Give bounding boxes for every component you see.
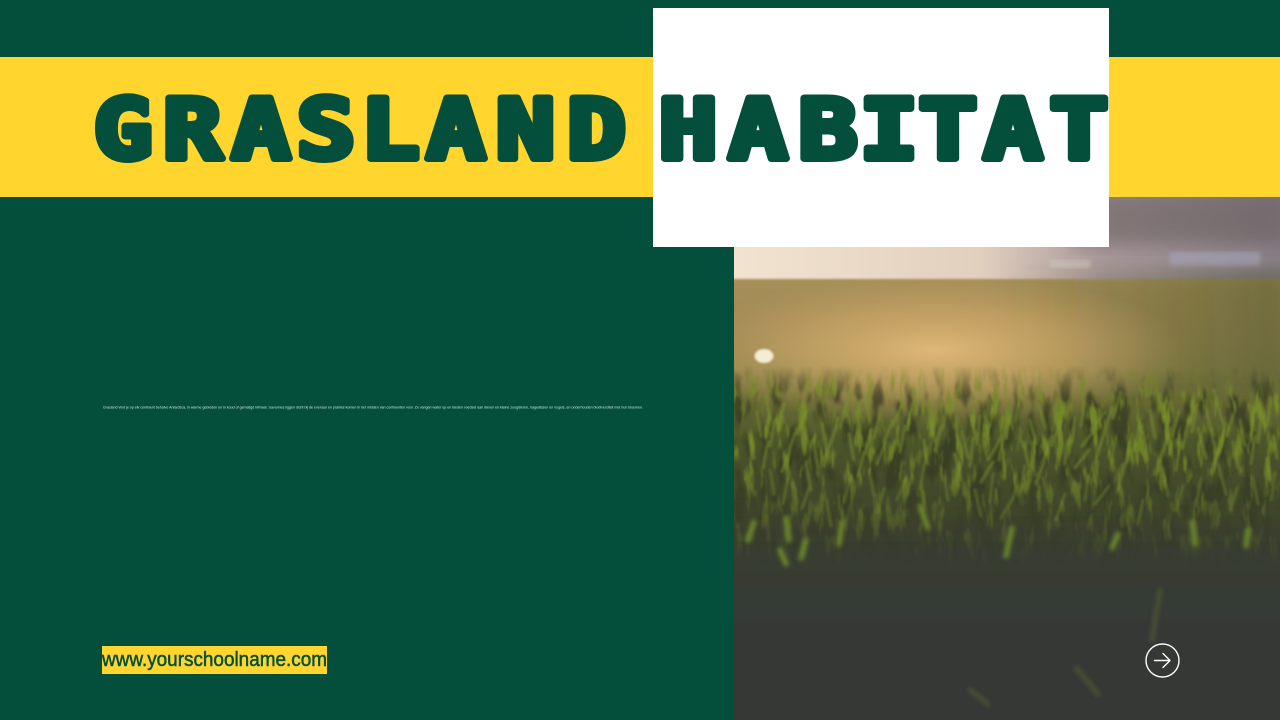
white title panel — [653, 8, 1109, 247]
photo: grass field at sunset — [734, 197, 1280, 720]
website label: www.yourschoolname.com — [101, 649, 327, 671]
grass texture — [734, 365, 1280, 565]
body text: Grasland vind je op elk continent behalve Antarctica, in warme gebieden en in koud of gematigd klimaat. Savannes liggen dicht bij de evenaar en prairies komen in het midden van continenten voor. Ze vangen water op en bieden voedsel aan dieren en kleine zoogdieren, hagedissen en vogels, en onderhouden biodiversiteit met hun bloemen. — [103, 406, 643, 410]
low grass blades — [748, 506, 1248, 564]
grass blades — [750, 388, 1280, 526]
yellow title band — [0, 57, 1280, 197]
title: HABITAT: HABITAT — [659, 83, 1108, 179]
icon: arrow in circle — [1146, 644, 1179, 677]
title: GRASLAND: GRASLAND — [93, 83, 626, 179]
dim foreground blades — [970, 590, 1160, 704]
